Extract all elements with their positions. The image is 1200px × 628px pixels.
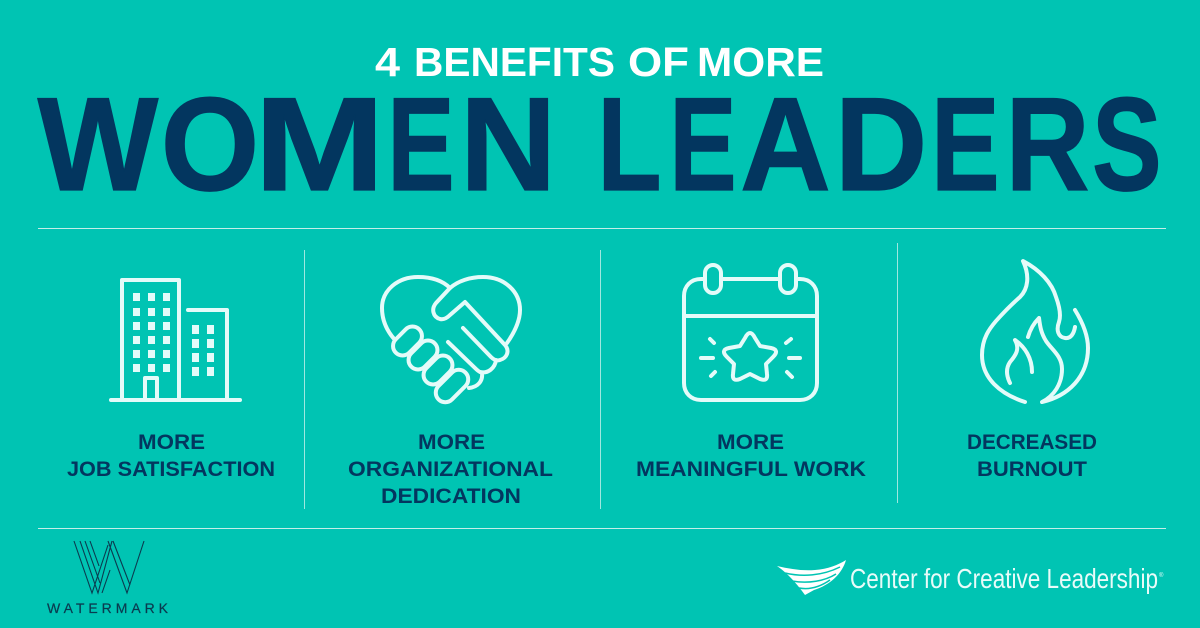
- title: women leaders: E: [669, 71, 737, 219]
- panel: organizational dedication: [348, 277, 553, 508]
- label: more organizational dedication: MORE: [418, 430, 485, 454]
- icon: watermark W: [74, 541, 144, 593]
- title: women leaders: M: [254, 71, 385, 219]
- title: women leaders: A: [740, 71, 831, 219]
- label: more job satisfaction: JOB SATISFACTION: [67, 457, 275, 481]
- title: women leaders: W: [38, 71, 159, 219]
- icon: office buildings: [111, 280, 240, 400]
- icon: ccl wing: [777, 560, 846, 595]
- label: decreased burnout: DECREASED: [967, 430, 1097, 454]
- label: more job satisfaction: MORE: [138, 430, 205, 454]
- title: women leaders: E: [387, 71, 455, 219]
- title: women leaders: N: [460, 71, 556, 219]
- logo: center for creative leadership: [777, 560, 1164, 595]
- registered mark: ®: [1159, 572, 1164, 579]
- icon: flame: [982, 261, 1088, 402]
- title: women leaders: E: [931, 71, 1000, 219]
- title: women leaders: R: [1006, 71, 1090, 219]
- heading: 4 benefits of more: BENEFITS: [414, 39, 615, 85]
- title: women leaders: O: [161, 71, 259, 219]
- heading: 4 benefits of more: MORE: [697, 39, 824, 85]
- logo: watermark: [47, 541, 169, 616]
- heading: 4 benefits of more: OF: [628, 39, 689, 85]
- panel: meaningful work: [636, 265, 866, 481]
- icon: handshake heart: [382, 277, 520, 406]
- text: watermark: WATERMARK: [47, 600, 169, 616]
- title: women leaders: S: [1092, 71, 1162, 219]
- label: more organizational dedication: ORGANIZATIONAL: [348, 457, 553, 481]
- label: more meaningful work: MORE: [717, 430, 784, 454]
- panel: decreased burnout: [967, 261, 1097, 481]
- title: women leaders: L: [597, 71, 662, 219]
- label: more organizational dedication: DEDICATION: [381, 484, 521, 508]
- label: decreased burnout: BURNOUT: [977, 457, 1087, 481]
- icon: calendar with star: [684, 265, 817, 400]
- label: more meaningful work: MEANINGFUL WORK: [636, 457, 866, 481]
- heading: 4 benefits of more: 4: [375, 39, 400, 85]
- title: women leaders: D: [835, 71, 927, 219]
- panel: job satisfaction: [67, 280, 275, 481]
